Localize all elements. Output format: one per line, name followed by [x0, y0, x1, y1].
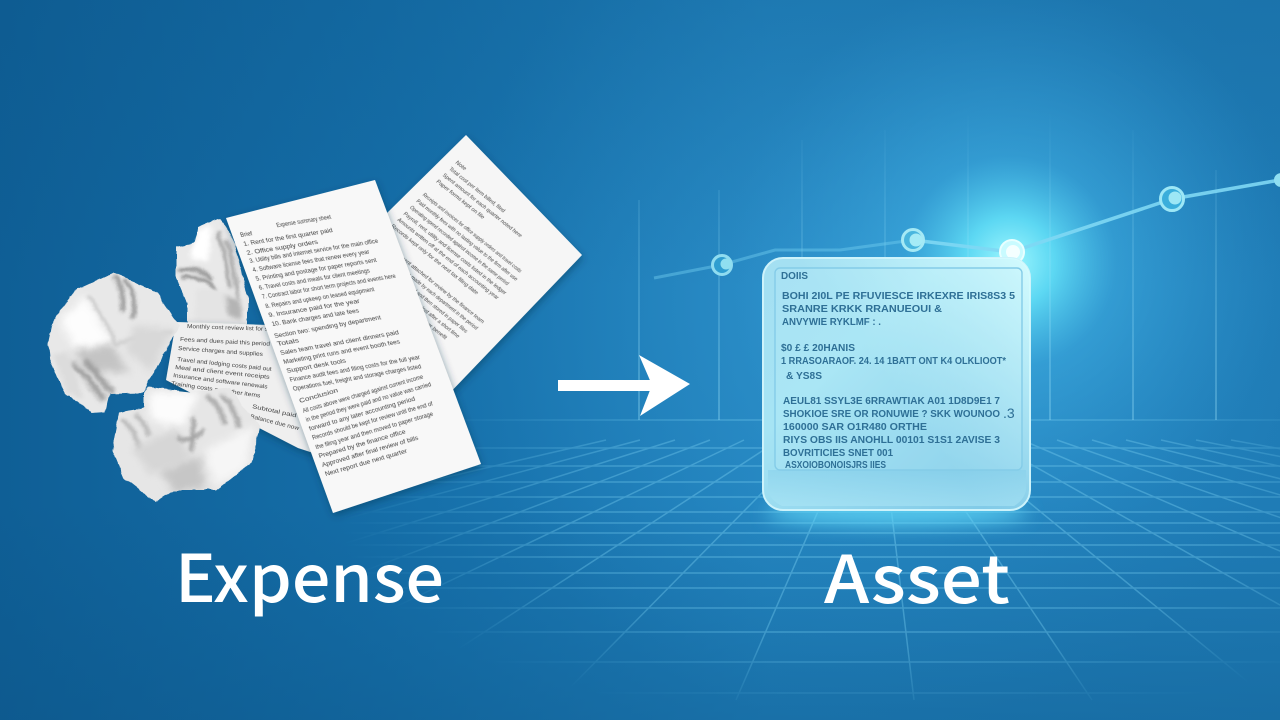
center sheet text block 1: 2. Office supply orders: [246, 240, 319, 257]
chart point 1: [712, 256, 732, 274]
back sheet text: [171, 324, 300, 432]
card document text: [781, 270, 1015, 471]
chart point 5: [1274, 173, 1280, 187]
card document text: SRANRE KRKK RRANUEOUI &: [782, 303, 942, 315]
right sheet text: Operating spend recorded against income in the same period: [408, 205, 510, 287]
card document text: $0 £ £ 20HANIS: [781, 342, 855, 354]
right sheet text: Records kept only for the next tax filing date: [389, 224, 479, 296]
card document text: AEUL81 SSYL3E 6RRAWTIAK A01 1D8D9E1 7: [783, 395, 1000, 407]
card document text: 160000 SAR O1R480 ORTHE: [783, 421, 927, 433]
center sheet text block 1: 3. Utility bills and internet service for the main office: [249, 239, 380, 265]
card foot: [768, 470, 1026, 506]
right sheet text: Total cost per item billed, filed: [447, 166, 506, 214]
label: Expense: Expense: [175, 526, 444, 622]
center sheet text block 1: [238, 208, 407, 328]
card document text: BOVRITICIES SNET 001: [783, 447, 893, 459]
chart line, right part: [913, 180, 1280, 252]
center sheet text block 1: 6. Travel costs and meals for client meetings: [258, 269, 371, 292]
right sheet text: Signed and dated by the manager: [330, 282, 397, 336]
crumpled paper ball: left: [48, 273, 180, 413]
back sheet text: Travel and lodging costs paid out: [177, 357, 272, 373]
center sheet text block 1: 4. Software license fees that renew every year: [252, 250, 371, 274]
right sheet text: Reports rarely read again and often lost after a short time: [356, 256, 460, 340]
card document text: & YS8S: [786, 370, 822, 382]
center sheet text block 3: in the period they were paid and no value was carried: [305, 382, 432, 424]
transition arrow: [558, 355, 690, 416]
chart line, left faint part: [654, 240, 913, 278]
card document text: ANVYWIE RYKLMF : .: [782, 316, 881, 328]
card document text: BOHI 2I0L PE RFUVIESCE IRKEXRE IRIS8S3 5: [782, 290, 1015, 302]
right sheet text: Amounts written off at the end of each accounting year: [395, 218, 500, 301]
chart point 4: [1160, 188, 1184, 210]
chart vertical gridlines: [639, 110, 1216, 420]
center sheet text block 3: the filing year and then moved to paper storage: [315, 411, 435, 451]
right sheet text: Payroll, rent, utility and license costs listed in the ledger: [402, 211, 507, 296]
back sheet text: Monthly cost review list for staff: [187, 324, 278, 333]
center sheet text block 2: Marketing print runs and event booth fees: [283, 340, 401, 366]
center sheet text block 2: Operations fuel, freight and storage charges listed: [292, 364, 422, 393]
right sheet text: [317, 160, 563, 383]
chart point 2: [902, 230, 924, 250]
center sheet text block 2: Totals: [276, 338, 300, 348]
center sheet text block 3: Approved after final review of bills: [321, 436, 419, 469]
label: Asset: Asset: [824, 527, 1010, 623]
right sheet text: Paid monthly fees with no lasting value to the firm after use: [415, 199, 519, 282]
center sheet of paper: [226, 180, 481, 513]
center sheet text block 1: Brief: [240, 231, 254, 239]
back sheet text: Meal and client event receipts: [175, 365, 270, 381]
right sheet text: Line items reconciled by hand and then stored in paper files: [363, 250, 468, 335]
center sheet text block 3: Conclusion: [299, 388, 339, 405]
back sheet text: Training costs and other items: [171, 381, 261, 400]
center sheet text block 2: [274, 311, 424, 393]
card document text: ASXOIOBONOISJRS IIES: [785, 459, 886, 471]
center sheet text block 1: Expense summary sheet: [276, 215, 332, 229]
right sheet text: Summary of purchases made by each department in the period: [369, 243, 479, 331]
crumpled paper ball: top: [176, 219, 249, 324]
card top highlight: [763, 258, 1030, 510]
right sheet text: End of report: [317, 295, 353, 324]
right sheet text: Vendor statement attached for review by the finance team: [375, 237, 485, 325]
center sheet text block 3: forward to any later accounting period: [309, 397, 416, 433]
back sheet of paper: [166, 322, 335, 460]
center sheet text block 2: Sales team travel and client dinners paid: [280, 330, 400, 357]
center sheet text block 3: All costs above were charged against current income: [302, 374, 425, 415]
center sheet text block 2: Support desk tools: [286, 359, 347, 375]
right sheet text: Costs continue every year with no further benefit: [350, 262, 448, 341]
paper pile: expense: [48, 135, 582, 513]
back sheet text: Balance due now: [250, 414, 300, 432]
glass asset card: [763, 258, 1030, 526]
center sheet text block 3: [299, 363, 451, 478]
card document text: .3: [1003, 405, 1015, 421]
center sheet text block 1: 8. Repairs and upkeep on leased equipment: [265, 287, 376, 310]
card body: [763, 258, 1030, 510]
center sheet text block 1: 1. Rent for the first quarter paid: [243, 228, 334, 248]
center sheet text block 3: Next report due next quarter: [324, 449, 408, 478]
card document text: RIYS OBS IIS ANOHLL 00101 S1S1 2AVISE 3: [783, 434, 1000, 446]
center sheet text block 1: 10. Bank charges and late fees: [271, 308, 360, 328]
center sheet text block 1: 5. Printing and postage for paper reports sent: [255, 258, 378, 283]
right sheet text: Paper forms kept on file: [434, 179, 485, 221]
center sheet text block 1: 7. Contract labor for short term projects and events here: [262, 274, 398, 301]
right sheet text: Receipts and invoices for office supply orders and travel costs: [421, 192, 523, 274]
perspective grid floor: [394, 419, 1280, 700]
back sheet text: Insurance and software renewals: [173, 373, 268, 391]
card document text: 1 RRASOARAOF. 24. 14 1BATT ONT K4 OLKLIOOT*: [781, 355, 1007, 367]
right sheet of paper: [317, 135, 582, 400]
center sheet text block 2: Finance audit fees and filing costs for the full year: [289, 355, 421, 384]
right sheet text: Spent amount for each quarter noted here: [441, 173, 523, 239]
right sheet text: Approved by the office of the controller: [336, 276, 411, 336]
card document text: DOIIS: [781, 270, 808, 282]
center sheet text block 3: Records should be kept for review until the end of: [312, 402, 434, 442]
right sheet text: Note: [454, 160, 467, 172]
center sheet text block 1: 9. Insurance paid for the year: [268, 299, 361, 319]
back sheet text: Service charges and supplies: [178, 346, 263, 358]
center sheet text block 3: Prepared by the finance office: [318, 429, 407, 460]
crumpled paper ball: bottom: [112, 387, 260, 502]
rising line chart: [654, 173, 1280, 278]
chart point 3 glowing: [1000, 240, 1024, 264]
back sheet text: Subtotal paid: [252, 404, 297, 419]
card document text: SHOKIOE SRE OR RONUWIE ? SKK WOUNOO: [783, 408, 1000, 420]
back sheet text: Fees and dues paid this period: [180, 337, 270, 348]
center sheet text block 2: Section two: spending by department: [274, 315, 382, 340]
inner document panel: [775, 268, 1022, 470]
card glow on floor: [765, 500, 1029, 526]
